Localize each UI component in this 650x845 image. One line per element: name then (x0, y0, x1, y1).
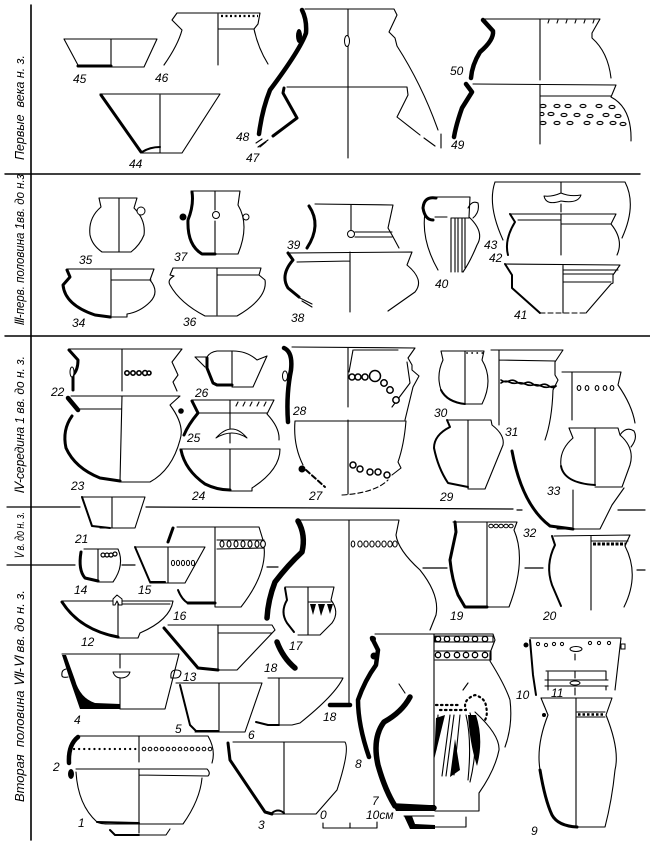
vessel 18 fragment: 18 (264, 661, 278, 675)
vessel 21 (74, 497, 145, 546)
vessel 49 (451, 84, 631, 152)
vessel 40: 40 (435, 277, 449, 291)
label 18 lower: 18 (323, 710, 337, 724)
vessel 26: 26 (194, 386, 209, 400)
vessel 31 (491, 350, 563, 440)
vessel 15: 15 (138, 583, 152, 597)
vessel 17: 17 (289, 639, 304, 653)
vessel 34 (63, 269, 155, 330)
vessel 44: 44 (129, 157, 143, 171)
vessel 45: 45 (73, 72, 87, 86)
vessel 33 upper (562, 372, 635, 423)
vessel 20: 20 (542, 609, 557, 623)
vessel 47 (246, 87, 435, 165)
vessel 20 (542, 535, 632, 623)
vessel 27 (295, 420, 406, 503)
vessel 11 (545, 671, 608, 700)
period label: 3rd to 1st half of 1st c.: Ⅲ-перв. половина 1вв. до н.з (12, 174, 27, 326)
vessel 29 (434, 420, 503, 504)
vessel 8 (267, 520, 437, 705)
vessel 25 (184, 400, 279, 445)
period label: second half 7th-6th c. BC: Вторая половина Ⅶ-Ⅵ вв. до н. з. (12, 590, 27, 802)
vessel 14: 14 (74, 583, 88, 597)
scale bar: 10см (366, 808, 394, 822)
vessel 16: 16 (173, 609, 187, 623)
vessel 14 (74, 549, 121, 597)
vessel 8 lower: 8 (355, 757, 362, 771)
vessel 7: 7 (372, 794, 380, 808)
vessel 25: 25 (186, 431, 201, 445)
vessel 31: 31 (505, 425, 518, 439)
vessel 9 (531, 698, 616, 838)
vessel 41 (505, 264, 620, 322)
vessel 15 (135, 547, 205, 597)
vessel 18 fragment (264, 642, 295, 675)
vessel 37: 37 (174, 250, 189, 264)
vessel 28 (282, 347, 419, 422)
vessel 36 (169, 268, 265, 329)
vessel 22 (50, 349, 182, 399)
vessel 8 lower (355, 634, 511, 810)
vessel 50: 50 (450, 64, 464, 78)
vessel 3: 3 (258, 818, 265, 832)
vessel 26 (194, 351, 267, 400)
vessel 36: 36 (183, 315, 197, 329)
vessel 23 (65, 396, 184, 493)
vessel 41: 41 (514, 308, 527, 322)
vessel 32: 32 (523, 526, 537, 540)
vessel 9: 9 (531, 824, 538, 838)
vessel 6: 6 (248, 728, 255, 742)
period label: first centuries: Первые века н. з. (12, 55, 27, 160)
vessel 19: 19 (450, 609, 464, 623)
vessel 48: 48 (236, 130, 250, 144)
vessel 35 (79, 198, 145, 267)
period label: 4th to mid 1st c. BC: Ⅳ-середина 1 вв. до н. з. (12, 356, 27, 494)
vessel 24 (180, 449, 280, 503)
label 18 lower (323, 705, 350, 724)
vessel 30 (434, 351, 488, 420)
vessel 7 (372, 684, 499, 829)
vessel 42: 42 (489, 251, 503, 265)
vessel 43: 43 (484, 238, 498, 252)
vessel 47: 47 (246, 151, 261, 165)
vessel 38: 38 (291, 311, 305, 325)
vessel 39 (287, 204, 399, 252)
vessel 22: 22 (50, 385, 65, 399)
vessel 2 (52, 736, 213, 774)
vessel 42 (489, 214, 619, 265)
vessel 16 (168, 527, 265, 623)
vessel 28: 28 (292, 404, 307, 418)
vessel 12 (62, 595, 173, 649)
vessel 10 (516, 638, 625, 702)
vessel 30: 30 (434, 406, 448, 420)
vessel 48 (236, 9, 441, 148)
vessel 3 (228, 742, 346, 832)
vessel 29: 29 (439, 490, 454, 504)
vessel 37 (174, 191, 249, 264)
vessel 33 (547, 428, 635, 498)
vessel 46 (155, 13, 268, 85)
vessel 35: 35 (79, 253, 93, 267)
vessel 43 (484, 182, 630, 252)
vessel 11: 11 (551, 686, 563, 700)
vessel 50 (450, 19, 611, 80)
vessel 40 (423, 197, 480, 291)
vessel 7 decoration (434, 683, 487, 782)
vessel 4 (62, 654, 181, 727)
vessel 27: 27 (308, 489, 324, 503)
vessel 17 (284, 587, 336, 653)
vessel 21: 21 (74, 532, 88, 546)
vessel 49: 49 (451, 138, 465, 152)
vessel 5: 5 (175, 722, 182, 736)
vessel 4: 4 (74, 713, 81, 727)
vessel 23: 23 (70, 479, 85, 493)
period label: 5th c. BC: Ⅴ в. до н. з. (12, 512, 27, 559)
vessel 32 (512, 451, 624, 540)
vessel 12: 12 (81, 635, 95, 649)
vessel 6 (248, 678, 343, 742)
vessel 33: 33 (547, 484, 561, 498)
vessel 39: 39 (287, 238, 301, 252)
vessel 45 (64, 39, 157, 86)
vessel 1 (68, 769, 209, 835)
vessel 1: 1 (78, 816, 85, 830)
label 13: 13 (183, 670, 197, 684)
vessel 46: 46 (155, 71, 169, 85)
vessel 44 (100, 94, 220, 171)
scale bar (320, 808, 394, 828)
vessel 5 (175, 683, 262, 736)
vessel 10: 10 (516, 688, 530, 702)
vessel 19 (450, 522, 519, 623)
scale bar: 0 (320, 808, 327, 822)
vessel 24: 24 (191, 489, 206, 503)
vessel 38 (285, 252, 419, 325)
vessel 2: 2 (52, 760, 60, 774)
vessel 18 upper (164, 625, 275, 670)
vessel 34: 34 (72, 316, 86, 330)
